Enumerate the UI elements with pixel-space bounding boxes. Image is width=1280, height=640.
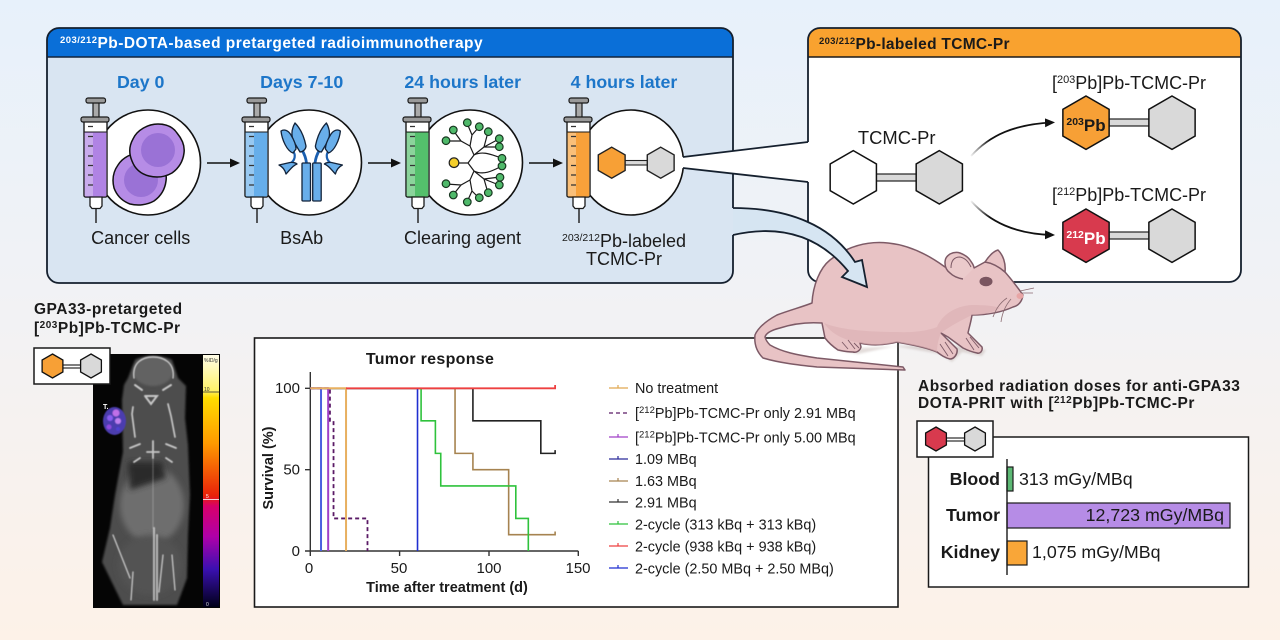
- tumor label: T.: [103, 404, 108, 411]
- axis labels: 50: [391, 560, 407, 577]
- bar: kidney: 1,075 mGy/MBq: [1032, 542, 1160, 562]
- label: 203: [1057, 74, 1075, 86]
- y axis title: Survival (%): [261, 426, 277, 510]
- label: clearing agent: Clearing agent: [404, 228, 521, 248]
- whiskers: [993, 288, 1034, 322]
- heading: absorbed radiation doses: Pb]Pb-TCMC-Pr: [1072, 395, 1195, 412]
- step headings: Days 7-10: [260, 72, 343, 92]
- step: cancer cells: [81, 98, 200, 248]
- heading: absorbed radiation doses: Absorbed radiation doses for anti-GPA33: [918, 378, 1240, 395]
- legend: 5.00 MBq only: 212: [639, 430, 655, 440]
- legend: 2-cycle 313: 2-cycle (313 kBq + 313 kBq): [635, 518, 816, 534]
- color scale bar: 10: [204, 387, 210, 393]
- legend: 2.91 MBq only: 212: [639, 405, 655, 416]
- icon: syringe purple: [81, 98, 109, 223]
- label: TCMC-Pr: [858, 127, 936, 148]
- [212Pb]Pb-TCMC-Pr molecule: Pb: [1084, 229, 1106, 248]
- legend: no treatment: No treatment: [635, 381, 718, 397]
- axis labels: [275, 380, 591, 577]
- [212Pb]Pb-TCMC-Pr molecule: [1052, 185, 1206, 262]
- paw toes: [842, 337, 979, 356]
- belly shading: [824, 305, 1000, 352]
- tumor uptake: [103, 407, 126, 435]
- survival curves: [310, 385, 555, 551]
- heading: GPA33-pretargeted imaging: Pb]Pb-TCMC-Pr: [58, 320, 181, 337]
- bar: tumor: [946, 503, 1230, 528]
- bar: kidney: Kidney: [941, 542, 1000, 562]
- label: Pb]Pb-TCMC-Pr: [1075, 185, 1206, 205]
- step: clearing agent: [403, 98, 522, 248]
- eye: [980, 277, 992, 286]
- heading: absorbed radiation doses: DOTA-PRIT with [: [918, 395, 1195, 412]
- legend: 2.91 MBq: 2.91 MBq: [635, 496, 697, 512]
- step headings: 24 hours later: [404, 72, 521, 92]
- icon: dendrimer clearing agent: [442, 119, 506, 206]
- legend: 1.09 MBq: 1.09 MBq: [635, 452, 697, 468]
- label: Pb]Pb-TCMC-Pr: [1075, 73, 1206, 93]
- legend: 1.63 MBq: 1.63 MBq: [635, 474, 697, 490]
- panel: absorbed dose bar chart: [928, 437, 1248, 587]
- legend: 5.00 MBq only: [: [635, 430, 639, 446]
- label: labeled TCMC-Pr: TCMC-Pr: [586, 249, 662, 269]
- arrow: injection into mouse: [733, 208, 867, 287]
- panel heading: Pb-labeled TCMC-Pr: [855, 36, 1010, 53]
- panel: tumor response survival chart: [254, 338, 898, 607]
- step: labeled TCMC-Pr: [562, 98, 686, 269]
- axis labels: 100: [476, 560, 502, 577]
- label: BsAb: BsAb: [280, 228, 323, 248]
- arrow: step 1 to 2: [207, 162, 238, 164]
- icon: labeled TCMC-Pr in step 4: [598, 147, 674, 178]
- color scale bar: 5: [206, 494, 209, 500]
- ears: [985, 250, 1005, 272]
- color scale bar: 0: [206, 602, 209, 608]
- label: 212: [1057, 186, 1075, 198]
- panel: 203/212Pb-labeled TCMC-Pr: [808, 28, 1241, 282]
- label: [: [1052, 73, 1057, 93]
- icon: cancer cells: [113, 124, 184, 205]
- TCMC-Pr molecule: [830, 127, 962, 204]
- [212Pb]Pb-TCMC-Pr molecule: 212: [1066, 229, 1084, 241]
- inset: labeled compound icon: [34, 348, 110, 384]
- icon: syringe blue: [242, 98, 270, 223]
- arrow: step 2 to 3: [368, 162, 399, 164]
- panel heading: 203/212: [60, 35, 98, 46]
- [203Pb]Pb-TCMC-Pr molecule: Pb: [1084, 116, 1106, 135]
- bar: tumor: Tumor: [946, 505, 1000, 525]
- inset: 212Pb compound icon: [917, 421, 993, 457]
- curved arrow to 203Pb: [971, 122, 1053, 156]
- heading: GPA33-pretargeted imaging: GPA33-pretargeted: [34, 301, 183, 318]
- icon: syringe orange: [564, 98, 592, 223]
- panel heading: 203/212: [819, 36, 855, 47]
- x axis title: Time after treatment (d): [366, 580, 528, 596]
- nose: [1016, 293, 1024, 299]
- panel heading: Pb-DOTA-based pretargeted radioimmunotherapy: [98, 35, 483, 52]
- heading: absorbed radiation doses: 212: [1054, 395, 1072, 406]
- illustration: mouse: [755, 243, 1034, 370]
- label: cancer cells: Cancer cells: [91, 228, 190, 248]
- legend: 2.91 MBq only: [: [635, 406, 639, 422]
- label: labeled TCMC-Pr: 203/212: [562, 232, 600, 244]
- skull and skeleton: [113, 357, 176, 600]
- mouse body in CT: [102, 356, 190, 605]
- axis labels: 0: [292, 543, 300, 560]
- bar: kidney: [941, 541, 1160, 565]
- bar: blood: Blood: [950, 469, 1000, 489]
- image: PET/CT mouse scan: [93, 354, 220, 608]
- heading: GPA33-pretargeted imaging: [: [34, 320, 181, 337]
- axis labels: 150: [565, 560, 591, 577]
- chart legend: [609, 381, 856, 578]
- chart axes: [305, 372, 578, 556]
- chart title: Tumor response: [366, 351, 494, 368]
- curved arrow to 212Pb: [971, 201, 1053, 235]
- color scale bar: [203, 355, 219, 608]
- tail and body: [755, 243, 1023, 370]
- axis labels: 0: [305, 560, 313, 577]
- step headings: [117, 72, 677, 92]
- bar: blood: 313 mGy/MBq: [1019, 469, 1133, 489]
- bar: blood: [950, 467, 1133, 491]
- bar: tumor: 12,723 mGy/MBq: [1086, 505, 1224, 525]
- callout wedge from step 4 to TCMC-Pr panel: [680, 142, 809, 182]
- step: bispecific antibody: [242, 98, 362, 248]
- panel: pretargeted radioimmunotherapy workflow: [47, 28, 733, 283]
- step headings: Day 0: [117, 72, 165, 92]
- arrow: step 3 to 4: [529, 162, 561, 164]
- step headings: 4 hours later: [571, 72, 677, 92]
- icon: BsAb antibody: [279, 123, 342, 201]
- legend: 2-cycle 2.50: 2-cycle (2.50 MBq + 2.50 MBq): [635, 562, 834, 578]
- [203Pb]Pb-TCMC-Pr molecule: [1052, 73, 1206, 149]
- icon: syringe green: [403, 98, 431, 223]
- label: [: [1052, 185, 1057, 205]
- axis labels: 100: [275, 380, 300, 397]
- axis labels: 50: [283, 462, 300, 478]
- color scale bar: %ID/g: [204, 358, 218, 364]
- legend: 2.91 MBq only: Pb]Pb-TCMC-Pr only 2.91 MBq: [655, 406, 856, 422]
- legend: 5.00 MBq only: Pb]Pb-TCMC-Pr only 5.00 MBq: [655, 430, 856, 446]
- shadow: [835, 346, 986, 362]
- label: labeled TCMC-Pr: Pb-labeled: [600, 231, 686, 251]
- heading: GPA33-pretargeted imaging: 203: [40, 320, 58, 331]
- legend: 2-cycle 938: 2-cycle (938 kBq + 938 kBq): [635, 540, 816, 556]
- [203Pb]Pb-TCMC-Pr molecule: 203: [1066, 116, 1084, 128]
